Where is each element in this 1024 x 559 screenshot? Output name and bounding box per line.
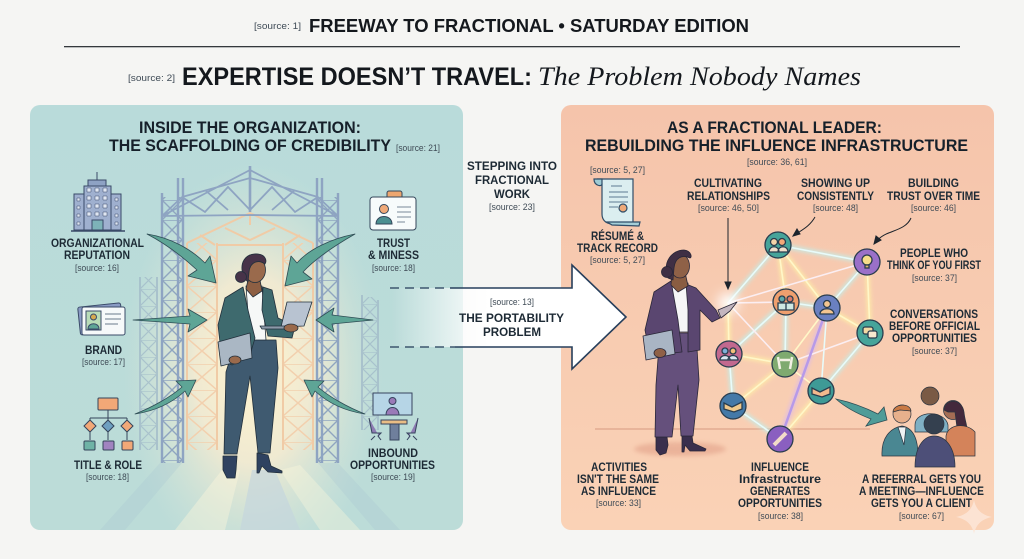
label: showing up consistently: [source: 48] bbox=[813, 203, 858, 213]
link glow bbox=[728, 245, 870, 439]
label: people who think of you first: [source: 37] bbox=[912, 273, 957, 283]
head bbox=[671, 272, 688, 292]
label: trustworthiness: TRUST bbox=[377, 238, 410, 250]
label: conversations before official opportunities: [source: 37] bbox=[912, 346, 957, 356]
icon: brand card bbox=[78, 303, 125, 335]
label: conversations before official opportunities: OPPORTUNITIES bbox=[892, 333, 977, 345]
arrows into the woman bbox=[133, 234, 373, 414]
label: people who think of you first: THINK OF YOU FIRST bbox=[887, 260, 981, 272]
warm inner frame bbox=[187, 213, 313, 450]
label: referral: [source: 67] bbox=[899, 511, 944, 521]
pointer arrows bbox=[725, 217, 911, 289]
label: influence infrastructure: [source: 38] bbox=[758, 511, 803, 521]
label: inbound opportunities: [source: 19] bbox=[371, 472, 415, 482]
arrow label bbox=[459, 297, 564, 339]
link core bbox=[728, 245, 870, 439]
label: trustworthiness: [source: 18] bbox=[372, 263, 415, 273]
icon: meeting room bbox=[369, 393, 418, 440]
label: inbound opportunities bbox=[350, 448, 435, 482]
label: title and role: TITLE & ROLE bbox=[74, 460, 142, 472]
node: handshake teal bbox=[808, 378, 834, 404]
main title: [source: 2] bbox=[128, 73, 175, 83]
trousers bbox=[224, 340, 278, 454]
panel heading: AS A FRACTIONAL LEADER: bbox=[667, 119, 882, 137]
label: people who think of you first: PEOPLE WHO bbox=[900, 248, 968, 260]
arrow label: THE PORTABILITY bbox=[459, 313, 564, 325]
label: resume: [source: 5, 27] bbox=[590, 165, 645, 175]
panel heading bbox=[109, 119, 440, 155]
client group bbox=[882, 387, 975, 467]
panel heading bbox=[585, 119, 968, 167]
label: referral bbox=[859, 474, 984, 521]
head bbox=[246, 280, 262, 297]
scaffolding bbox=[140, 166, 378, 463]
edition header: [source: 1] bbox=[254, 21, 301, 31]
label: cultivating relationships: [source: 46, 50] bbox=[698, 203, 759, 213]
label: activities: AS INFLUENCE bbox=[581, 486, 656, 498]
label: referral: GETS YOU A CLIENT bbox=[871, 498, 972, 510]
label: cultivating relationships bbox=[687, 178, 770, 213]
label: influence infrastructure bbox=[738, 462, 822, 521]
label: activities: [source: 33] bbox=[596, 498, 641, 508]
side scaffold right bbox=[362, 295, 378, 430]
label: influence infrastructure: Infrastructure bbox=[739, 474, 821, 486]
shirt bbox=[672, 283, 690, 332]
folder bbox=[643, 330, 675, 360]
label: resume: TRACK RECORD bbox=[577, 243, 658, 255]
label: trustworthiness: & MINESS bbox=[368, 250, 419, 262]
floor line bbox=[595, 428, 870, 430]
node: handshake blue bbox=[720, 393, 746, 419]
label: organizational reputation bbox=[51, 238, 144, 273]
sparkle bbox=[956, 500, 992, 534]
shoes bbox=[656, 437, 668, 455]
node: idea bbox=[854, 249, 880, 275]
shoes bbox=[223, 456, 237, 478]
trousers bbox=[655, 333, 699, 437]
icon: office building bbox=[71, 172, 125, 231]
node: people pink bbox=[716, 341, 742, 367]
node: relationships bbox=[765, 232, 791, 258]
label: title and role: [source: 18] bbox=[86, 472, 129, 482]
ground shadows and light beams bbox=[100, 463, 400, 530]
label: stepping into fractional work bbox=[467, 159, 557, 212]
label: title and role bbox=[74, 460, 142, 482]
label: conversations before official opportunities: BEFORE OFFICIAL bbox=[889, 321, 980, 333]
side scaffold left bbox=[140, 277, 157, 450]
label: cultivating relationships: RELATIONSHIPS bbox=[687, 191, 770, 203]
panel heading: [source: 21] bbox=[396, 143, 440, 153]
laptop bbox=[281, 302, 312, 327]
label: referral: A MEETING—INFLUENCE bbox=[859, 486, 984, 498]
label: resume bbox=[577, 165, 658, 265]
main title: EXPERTISE DOESN’T TRAVEL: bbox=[182, 63, 532, 91]
arrow to client group bbox=[836, 399, 887, 426]
folder bbox=[218, 333, 252, 366]
blue towers bbox=[162, 166, 338, 463]
arrow label: [source: 13] bbox=[490, 297, 534, 307]
panel: as a fractional leader bbox=[561, 105, 994, 534]
main title: The Problem Nobody Names bbox=[538, 62, 861, 91]
woman with laptop bbox=[218, 254, 312, 478]
node: chain bbox=[767, 426, 793, 452]
label: conversations before official opportunities bbox=[889, 309, 980, 356]
label: resume: [source: 5, 27] bbox=[590, 255, 645, 265]
label: building trust over time: BUILDING bbox=[908, 178, 959, 190]
label: influence infrastructure: INFLUENCE bbox=[751, 462, 809, 474]
label: influence infrastructure: GENERATES bbox=[750, 486, 810, 498]
portability arrow bbox=[390, 265, 626, 369]
shirt bbox=[246, 286, 266, 340]
icon: resume scroll bbox=[594, 179, 640, 226]
label: resume: RÉSUMÉ & bbox=[591, 230, 644, 243]
arrow label: PROBLEM bbox=[483, 327, 541, 339]
node: chat bbox=[857, 320, 883, 346]
label: organizational reputation: ORGANIZATIONAL bbox=[51, 238, 144, 250]
label: conversations before official opportunities: CONVERSATIONS bbox=[890, 309, 978, 321]
label: brand bbox=[82, 345, 125, 367]
node: group bbox=[773, 289, 799, 315]
label: brand: [source: 17] bbox=[82, 357, 125, 367]
label: referral: A REFERRAL GETS YOU bbox=[862, 474, 981, 486]
network nodes bbox=[716, 232, 883, 452]
label: stepping into fractional work: FRACTIONAL bbox=[475, 173, 549, 187]
node: collaboration bbox=[772, 351, 798, 377]
label: trustworthiness bbox=[368, 238, 419, 273]
label: brand: BRAND bbox=[85, 345, 122, 357]
label: building trust over time: [source: 46] bbox=[911, 203, 956, 213]
label: showing up consistently bbox=[797, 178, 874, 213]
label: showing up consistently: CONSISTENTLY bbox=[797, 191, 874, 203]
label: activities: ACTIVITIES bbox=[591, 462, 647, 474]
label: inbound opportunities: OPPORTUNITIES bbox=[350, 460, 435, 472]
label: stepping into fractional work: WORK bbox=[494, 187, 530, 201]
panel heading: REBUILDING THE INFLUENCE INFRASTRUCTURE bbox=[585, 137, 968, 155]
label: stepping into fractional work: [source: 23] bbox=[489, 202, 535, 212]
label: building trust over time: TRUST OVER TIME bbox=[887, 191, 980, 203]
label: activities: ISN'T THE SAME bbox=[577, 474, 659, 486]
panel heading: THE SCAFFOLDING OF CREDIBILITY bbox=[109, 137, 391, 155]
icon: org chart bbox=[84, 398, 133, 450]
label: inbound opportunities: INBOUND bbox=[368, 448, 418, 460]
label: activities bbox=[577, 462, 659, 508]
jacket bbox=[218, 287, 255, 365]
label: influence infrastructure: OPPORTUNITIES bbox=[738, 498, 822, 510]
label: organizational reputation: REPUTATION bbox=[64, 250, 130, 262]
panel heading: INSIDE THE ORGANIZATION: bbox=[139, 119, 361, 137]
label: showing up consistently: SHOWING UP bbox=[801, 178, 870, 190]
icon: id badge bbox=[370, 191, 416, 230]
label: people who think of you first bbox=[887, 248, 981, 283]
jacket bbox=[645, 281, 720, 355]
label: organizational reputation: [source: 16] bbox=[75, 263, 119, 273]
panel heading: [source: 36, 61] bbox=[747, 157, 807, 167]
label: building trust over time bbox=[887, 178, 980, 213]
network links bbox=[718, 245, 870, 439]
main title bbox=[128, 62, 861, 91]
label: stepping into fractional work: STEPPING INTO bbox=[467, 159, 557, 173]
node: person bbox=[814, 295, 840, 321]
label: cultivating relationships: CULTIVATING bbox=[694, 178, 762, 190]
edition header: FREEWAY TO FRACTIONAL • SATURDAY EDITION bbox=[309, 15, 749, 36]
panel: inside the organization bbox=[30, 105, 463, 530]
woman presenting bbox=[643, 250, 737, 455]
